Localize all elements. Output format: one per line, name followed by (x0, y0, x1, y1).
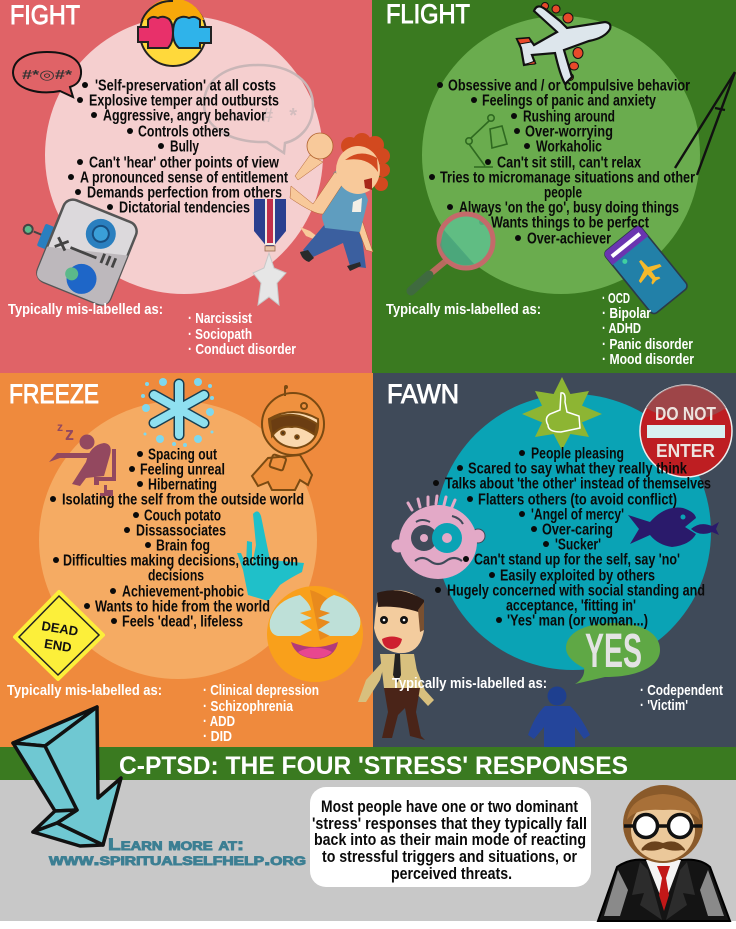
icon: 3D down arrow (13, 707, 121, 846)
title banner: C-PTSD: THE FOUR 'STRESS' RESPONSES (119, 752, 628, 780)
icon: dividers (675, 72, 735, 175)
icon: dead end sign: END (43, 636, 73, 655)
icon: radio device (8, 186, 140, 307)
text block: fight traits: Demands perfection from others (87, 184, 282, 202)
list: freeze labels: · ADD (203, 713, 235, 730)
text block: fawn traits: Scared to say what they really think (468, 460, 687, 478)
text block: fight traits: Controls others (138, 124, 230, 140)
icon: sleeping person (49, 420, 116, 496)
icon: sleeping person: z (57, 420, 63, 434)
panel: flight (372, 0, 736, 373)
text block: freeze traits: Wants to hide from the world (95, 598, 270, 616)
list: flight labels: · ADHD (602, 320, 641, 337)
list: freeze labels: · DID (203, 728, 232, 745)
panel: footer (0, 780, 736, 921)
list: fight labels (188, 310, 296, 358)
text block: fawn traits: Flatters others (to avoid conflict) (478, 492, 677, 508)
text block: flight traits: Feelings of panic and anxiety (482, 92, 656, 110)
icon: yes speech bubble: YES (585, 625, 642, 678)
list: flight labels: · Bipolar (602, 305, 651, 322)
text block: flight traits: people (544, 184, 582, 202)
icon: big fish and small fish (628, 508, 719, 547)
heading: fawn: FAWN (387, 379, 459, 409)
list: flight labels: · OCD (602, 290, 630, 307)
list: fight labels: · Sociopath (188, 326, 252, 343)
icon: astronaut (252, 386, 324, 490)
panel: fawn (373, 373, 736, 748)
text block: fight traits: Explosive temper and outbursts (89, 92, 279, 110)
icon: faint speech bubble: #* (262, 105, 297, 127)
text block: fight traits (68, 78, 288, 216)
text block: freeze traits: Hibernating (148, 476, 217, 494)
icon: do not enter sign: DO NOT (655, 404, 716, 424)
icon: swearing speech bubble (13, 52, 81, 97)
icon: do not enter sign (640, 385, 732, 477)
list: freeze labels: · Schizophrenia (203, 698, 294, 715)
callout: dominant responses: Most people have one or two dominant (321, 798, 578, 816)
illustration: angry man (290, 133, 390, 271)
text block: fight traits: Dictatorial tendencies (119, 200, 250, 216)
icon: sleeping person: z (65, 424, 74, 444)
text block: freeze traits: decisions (148, 568, 204, 584)
text block: freeze traits: Achievement-phobic (122, 584, 244, 600)
callout: dominant responses: perceived threats. (391, 865, 512, 883)
text block: freeze traits: Isolating the self from the outside world (62, 492, 304, 508)
icon: boxing gloves (138, 0, 211, 66)
illustration: businessman (598, 785, 730, 921)
text block: fight traits: Can't 'hear' other points of view (89, 154, 280, 172)
callout: dominant responses: back into as their main mode of reacting (314, 831, 586, 849)
illustration: cartoon man (358, 590, 434, 740)
list: flight labels (602, 290, 694, 368)
icon: airplane (517, 2, 610, 84)
text block: flight traits: Rushing around (523, 108, 615, 126)
panel: fight (0, 0, 372, 373)
text block: freeze traits: Brain fog (156, 538, 210, 554)
text block: fawn traits (433, 446, 711, 630)
link: learn more: www.spiritualselfhelp.org (49, 850, 306, 869)
text block: fawn traits: 'Angel of mercy' (531, 506, 624, 524)
text block: freeze traits: Difficulties making decisions, acting on (63, 552, 298, 570)
heading: freeze: FREEZE (9, 379, 99, 409)
icon: magnifying glass (411, 214, 493, 291)
text block: fawn traits: 'Yes' man (or woman...) (507, 612, 648, 630)
text block: flight traits: Workaholic (536, 138, 602, 156)
text block: flight traits: Can't sit still, can't relax (497, 154, 641, 172)
link: learn more (49, 835, 306, 869)
text block: flight traits: Obsessive and / or compulsive behavior (448, 78, 690, 94)
panel: freeze (0, 373, 373, 748)
text block: fawn traits: Over-caring (542, 522, 613, 538)
icon: do not enter sign: ENTER (656, 441, 715, 461)
list: flight labels: · Panic disorder (602, 336, 693, 353)
icon: medal (253, 199, 286, 305)
list: fight labels: · Conduct disorder (188, 341, 296, 358)
icon: faint speech bubble (204, 65, 313, 153)
text block: fight traits: 'Self-preservation' at all costs (95, 78, 276, 94)
label: flight mis-labelled: Typically mis-labelled as: (386, 301, 541, 318)
label: freeze mis-labelled: Typically mis-labelled as: (7, 682, 162, 699)
text block: fight traits: Aggressive, angry behavior (103, 108, 266, 124)
list: fawn labels: · 'Victim' (640, 697, 688, 714)
text block: freeze traits: Spacing out (148, 446, 217, 464)
text block: fawn traits: People pleasing (531, 446, 624, 462)
icon: desk lamp (466, 115, 507, 167)
text block: fawn traits: Easily exploited by others (500, 568, 655, 584)
text block: fawn traits: acceptance, 'fitting in' (506, 598, 636, 614)
text block: fawn traits: Can't stand up for the self, say 'no' (474, 552, 680, 568)
list: fight labels: · Narcissist (188, 310, 252, 327)
icon: thumbs up star (522, 377, 602, 450)
text block: freeze traits: Feels 'dead', lifeless (122, 614, 243, 630)
icon: hiding emoji (267, 586, 363, 682)
icon: blue person (528, 686, 590, 748)
list: fawn labels (640, 682, 723, 714)
text block: freeze traits: Couch potato (144, 508, 221, 524)
callout: dominant responses: 'stress' responses that they typically fall (312, 815, 587, 833)
icon: dead end sign: DEAD (41, 618, 79, 639)
icon: yes speech bubble (566, 623, 660, 684)
text block: fight traits: A pronounced sense of entitlement (80, 170, 288, 186)
text block: flight traits: Over-worrying (525, 124, 613, 140)
icon: pointing hand (237, 511, 304, 601)
text block: fight traits: Bully (170, 138, 199, 156)
text block: freeze traits: Dissassociates (136, 522, 226, 540)
icon: snowflake (141, 378, 214, 447)
callout: dominant responses (310, 787, 591, 887)
text block: freeze traits: Feeling unreal (140, 462, 225, 478)
text block: flight traits: Always 'on the go', busy doing things (459, 200, 679, 216)
text block: fawn traits: 'Sucker' (555, 536, 601, 554)
text block: flight traits (429, 78, 695, 248)
label: fight mis-labelled: Typically mis-labelled as: (8, 301, 163, 318)
icon: dead end sign (15, 592, 103, 679)
icon: swearing speech bubble: #*◎#* (22, 67, 73, 82)
label: fawn mis-labelled: Typically mis-labelled as: (392, 675, 547, 692)
title banner (0, 747, 736, 780)
list: freeze labels: · Clinical depression (203, 682, 319, 699)
text block: flight traits: Wants things to be perfect (491, 214, 649, 232)
link: learn more: Learn more at: (108, 835, 244, 854)
text block: flight traits: Over-achiever (527, 230, 611, 248)
callout: dominant responses: to stressful triggers and situations, or (322, 848, 577, 866)
list: freeze labels (203, 682, 319, 745)
icon: smartphone (603, 224, 689, 316)
list: flight labels: · Mood disorder (602, 351, 694, 368)
text block: freeze traits (50, 446, 304, 630)
heading: fight: FIGHT (10, 0, 80, 30)
icon: worried face (391, 496, 485, 579)
